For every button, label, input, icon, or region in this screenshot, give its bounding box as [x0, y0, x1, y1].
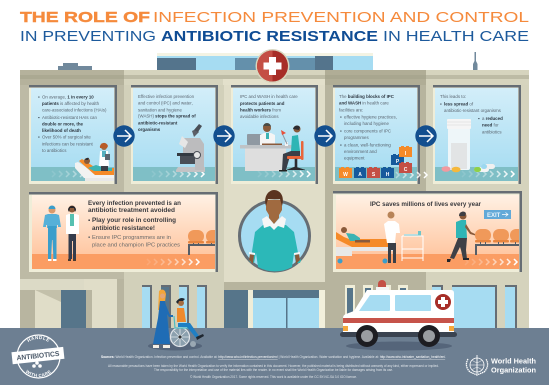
lower centre windows [224, 282, 332, 328]
logo: World Health Organization [466, 355, 536, 375]
text: burden: to antibiotics [42, 148, 67, 153]
text: IPC and WASH: and control (IPC) and water, [138, 100, 193, 106]
text: leads to: antibiotic-resistant organisms [444, 108, 502, 113]
text: sources and legal notice: The responsibility for the interpretation and use of the material lies with the reader. In no event shall the World Health Organization be liable for damages arising from its use. [154, 368, 393, 372]
illustration: two health workers [43, 206, 79, 261]
text: building blocks [339, 94, 397, 160]
building [20, 52, 529, 328]
illustration: trolley [402, 231, 423, 261]
title: IN PREVENTING [20, 28, 156, 45]
text: treatment avoided: ▪ [88, 235, 90, 241]
text: IPC and WASH: organisms [138, 127, 161, 132]
lower left wing [20, 279, 124, 328]
text: burden: ▪ [38, 94, 40, 100]
text: building blocks: a clean, well-functioning [344, 142, 391, 148]
panel: this leads to [433, 85, 521, 184]
illustration: walking person [447, 212, 477, 262]
title: ANTIBIOTIC RESISTANCE [161, 28, 378, 45]
text: protects: protects patients and [240, 101, 285, 106]
text: burden: double or more, the [42, 122, 84, 126]
badge: handle antibiotics with care: HANDLE [27, 336, 50, 342]
text: treatment avoided: antibiotic treatment avoided [88, 208, 175, 214]
title: THE ROLE OF [20, 9, 150, 26]
text: burden: infections can be resistant [42, 142, 94, 146]
facade [20, 70, 529, 328]
text: building blocks: The building blocks of IPC [339, 94, 395, 99]
icon: WASH and IPC building blocks: C [404, 167, 408, 173]
text: burden: On average, 1 in every 10 [42, 94, 94, 100]
text: building blocks: including hand hygiene [344, 121, 389, 126]
heading: saves millions: IPC saves millions of lives every year [370, 202, 482, 208]
text: leads to: ▪ [440, 102, 442, 106]
icon: microscope [176, 124, 205, 172]
text: building blocks: effective hygiene practices, [344, 114, 397, 120]
panel: building blocks [333, 85, 427, 184]
text: burden [38, 94, 107, 153]
text: building blocks: ▪ [340, 114, 342, 120]
illustration: woman pushing wheelchair [148, 290, 204, 350]
text: burden: ▪ [38, 115, 40, 120]
narrow windows [142, 285, 207, 328]
panel: IPC saves millions of lives [333, 191, 526, 272]
lower right windows [345, 285, 517, 328]
text: building blocks: environment and [344, 149, 377, 154]
title: INFECTION PREVENTION AND CONTROL [153, 9, 529, 26]
portrait: health worker in circle [240, 190, 310, 271]
text: burden: care-associated infections (HAIs) [42, 108, 107, 112]
text: sources and legal notice: All reasonable precautions have been taken by the World Health Organization to verify the information contained in this document. However, the published material is being distributed without warranty of any kind, either expressed or implied. [108, 364, 439, 368]
text: building blocks: and WASH in health care [339, 100, 389, 106]
text: burden: Over 50% of surgical site [42, 134, 91, 140]
text: IPC and WASH: antibiotic-resistant [138, 120, 178, 126]
illustration: patient in bed with nurse [75, 143, 114, 181]
panel: burden of infections [29, 85, 117, 184]
badge: handle antibiotics with care: WITH CARE [26, 370, 52, 377]
text: building blocks: core components of IPC [344, 128, 391, 134]
icon: hospital cross [256, 49, 290, 83]
icon: WASH and IPC building blocks: A [358, 172, 362, 178]
illustration: waiting chairs [188, 230, 215, 255]
text: sources and legal notice [101, 355, 446, 379]
sign: exit: EXIT [487, 213, 501, 219]
text: IPC and WASH [138, 94, 196, 132]
text: protects [240, 94, 298, 119]
panel: protects patients and health workers [231, 85, 318, 184]
icon: WASH and IPC building blocks: S [372, 172, 376, 178]
text: IPC and WASH: (WASH) stops the spread of [138, 114, 196, 118]
arrow: step 1 to 2 [113, 125, 135, 147]
illustration: patient in bed with doctor [336, 212, 400, 264]
roof vent [58, 63, 92, 70]
text: burden: patients is affected by health [42, 101, 100, 106]
badge: handle antibiotics with care [12, 334, 64, 379]
text: building blocks: facilities are: [339, 108, 363, 112]
text: building blocks: ▪ [340, 142, 342, 148]
icon: WASH and IPC building blocks: W [343, 172, 348, 178]
text: treatment avoided: antibiotic resistance! [92, 226, 155, 232]
text: protects: IPC and WASH in health care [240, 94, 298, 99]
title [20, 9, 529, 45]
text: treatment avoided: ▪ [88, 218, 90, 224]
text: burden: Antibiotic-resistant HAIs can [42, 115, 97, 120]
road [0, 328, 549, 385]
text: treatment avoided: place and champion IPC practices [92, 242, 180, 248]
text: treatment avoided: Play your role in controlling [92, 218, 176, 224]
text: protects: health workers from [240, 108, 281, 112]
text: leads to: antibiotics [482, 130, 502, 134]
text: sources and legal notice: Sources: World Health Organization. Infection prevention and control. Available at: http://www.who.int/infection-prevention/en/ | World Health Organization. Water sanitation and hygiene. Available at: http://www.who.int/water_sanitation_health/en/. [101, 355, 446, 359]
text: leads to: less spread of [444, 102, 474, 106]
logo: World Health Organization: Organization [491, 366, 536, 374]
icon: pill bottle and pills [442, 119, 495, 172]
text: building blocks: equipment [344, 156, 365, 160]
illustration: waiting chairs [475, 229, 519, 255]
text: leads to: a reduced [482, 116, 503, 121]
logo: World Health Organization: World Health [491, 356, 536, 366]
arrow: step 4 to 5 [415, 125, 437, 147]
antenna [473, 52, 478, 71]
icon: WASH and IPC building blocks: I [405, 151, 407, 157]
text: leads to: need for [482, 122, 499, 128]
text: leads to [440, 94, 503, 134]
icon: WASH and IPC building blocks [339, 146, 412, 178]
arrow: step 3 to 4 [314, 125, 336, 147]
icon: ambulance cross [435, 294, 451, 310]
text: IPC and WASH: Effective infection prevention [138, 94, 195, 99]
icon: WASH and IPC building blocks: H [386, 172, 390, 178]
text: treatment avoided [88, 201, 181, 248]
text: protects: avoidable infections [240, 114, 279, 119]
icon: WASH and IPC building blocks: P [396, 159, 400, 165]
upper floor glazing [157, 53, 373, 71]
text: building blocks: programmes [344, 135, 369, 140]
sign: exit [484, 210, 511, 219]
illustration: consultation at a desk [240, 123, 305, 172]
text: IPC and WASH: sanitation and hygiene [138, 108, 182, 112]
text: treatment avoided: Ensure IPC programmes are in [92, 235, 171, 241]
panel: stops the spread [131, 85, 218, 184]
text: building blocks: ▪ [340, 128, 342, 134]
panel: every infection prevented [29, 192, 222, 272]
badge: handle antibiotics with care: ANTIBIOTICS [16, 351, 60, 362]
arrow: step 2 to 3 [213, 125, 235, 147]
text: treatment avoided: Every infection prevented is an [88, 201, 181, 207]
text: burden: likelihood of death [42, 128, 81, 133]
text: sources and legal notice: © World Health Organization 2017. Some rights reserved. This work is available under the CC BY-NC-SA 3.0 IGO licence. [190, 375, 357, 379]
text: leads to: ▪ [478, 116, 480, 121]
text: leads to: This leads to: [440, 94, 466, 99]
text: burden: ▪ [38, 134, 40, 140]
illustration: ambulance [340, 280, 457, 350]
title: IN HEALTH CARE [383, 28, 529, 45]
